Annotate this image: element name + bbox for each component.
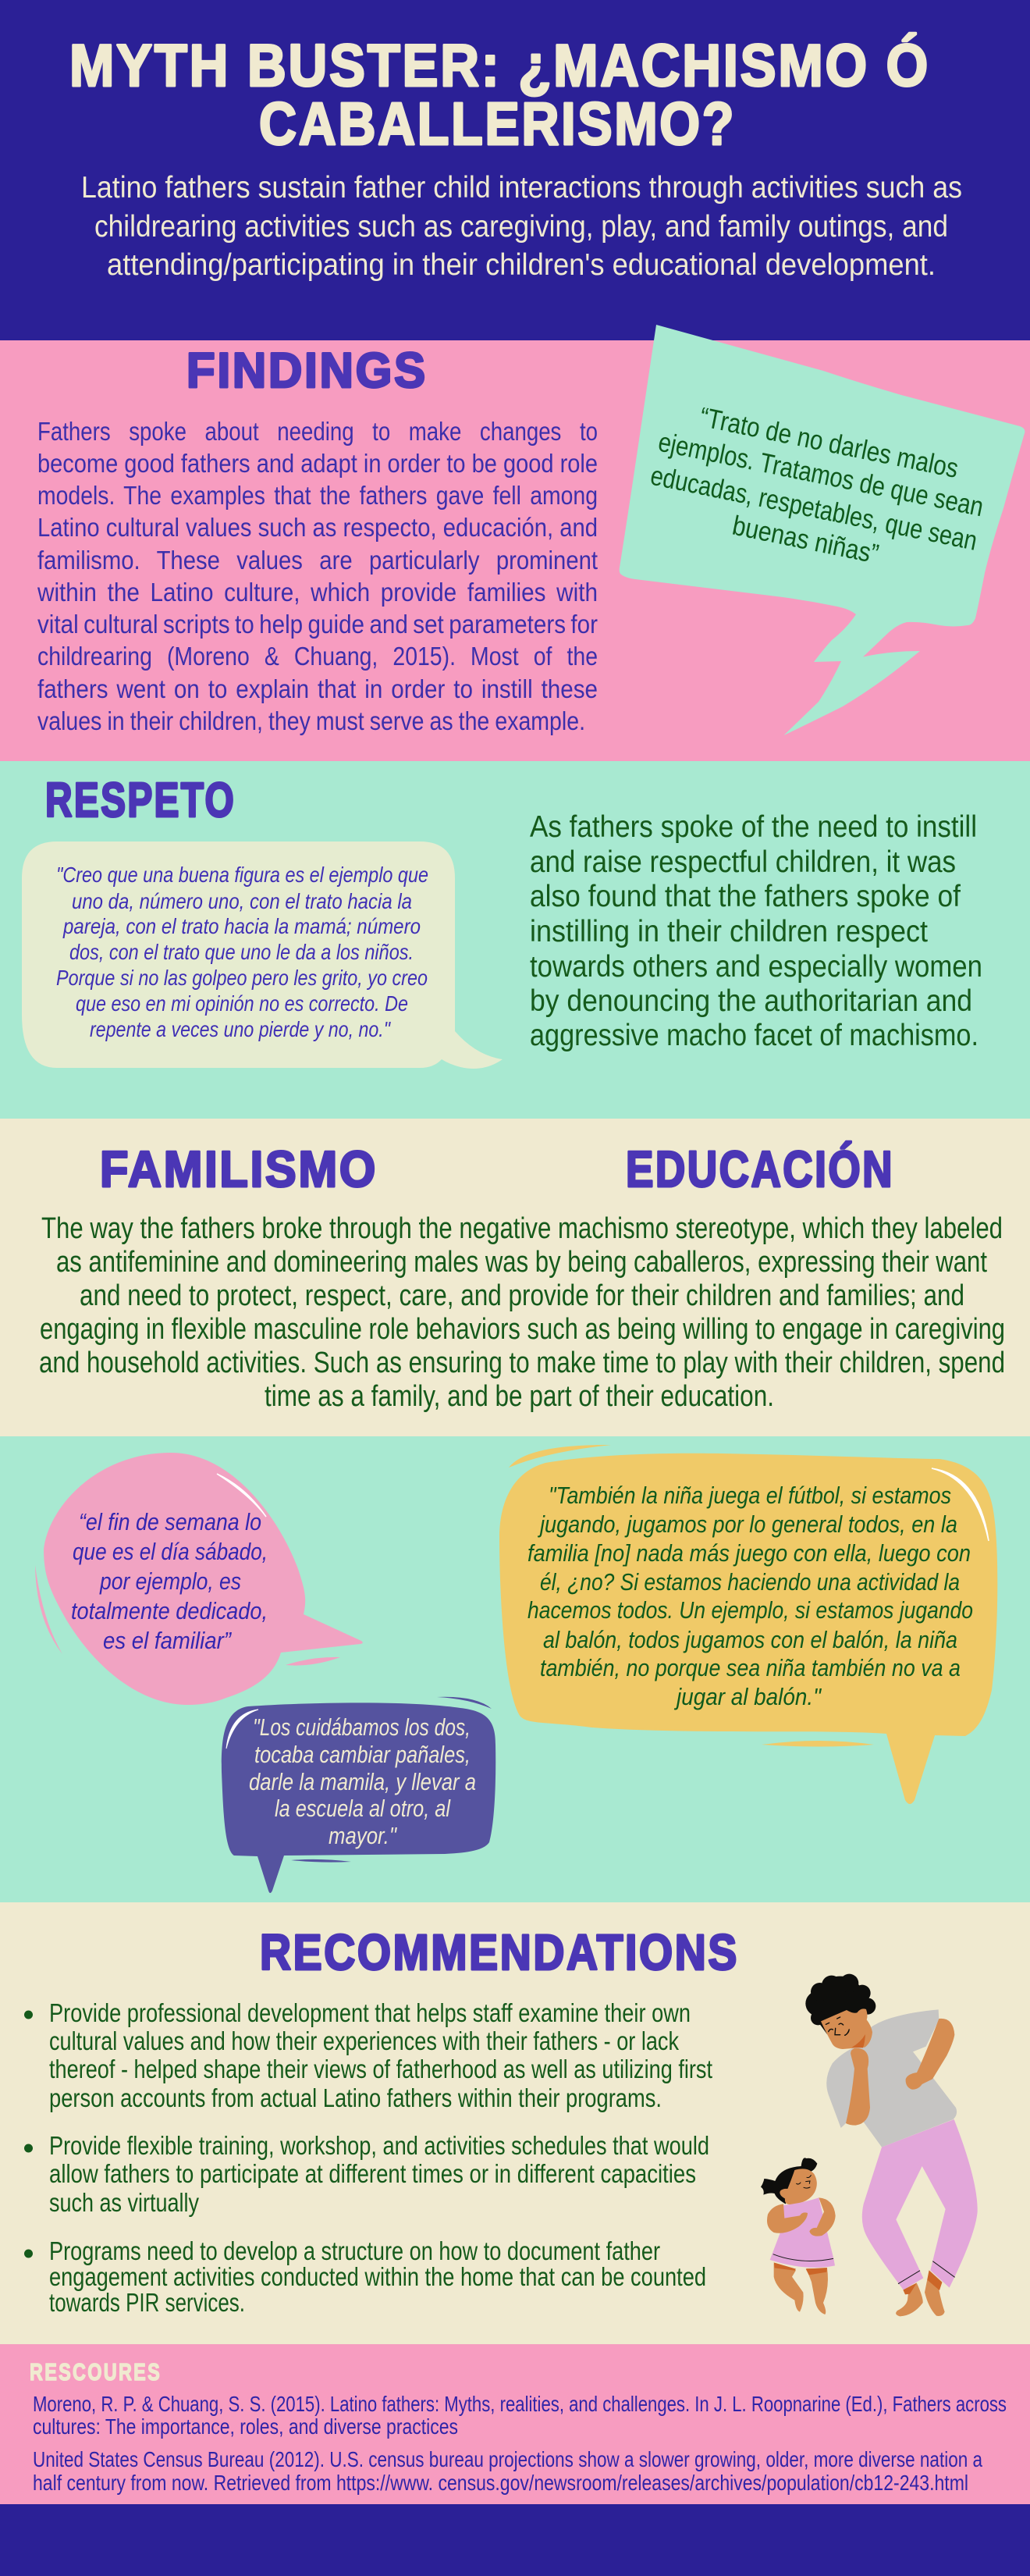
respeto paragraph: by denouncing the authoritarian and — [530, 984, 972, 1018]
recommendation 1: person accounts from actual Latino fathers within their programs. — [49, 2083, 662, 2112]
quote text: mayor." — [329, 1822, 398, 1849]
quote text: repente a veces uno pierde y no, no." — [90, 1017, 391, 1041]
intro text: childrearing activities such as caregiving, play, and family outings, and — [94, 210, 948, 244]
respeto paragraph — [530, 810, 982, 1052]
respeto paragraph: As fathers spoke of the need to instill — [530, 810, 977, 844]
intro text: Latino fathers sustain father child interactions through activities such as — [81, 171, 962, 205]
quote text: "Los cuidábamos los dos, — [253, 1713, 471, 1741]
quote text — [527, 1482, 973, 1710]
panel: respeto — [0, 761, 1030, 1119]
panel: quotes — [0, 1436, 1030, 1902]
findings paragraph: become good fathers and adapt in order to be good role — [37, 449, 598, 478]
title: CABALLERISMO? — [259, 91, 736, 158]
heading: resources: RESCOURES — [30, 2358, 162, 2386]
recommendation 1: thereof - helped shape their views of fatherhood as well as utilizing first — [49, 2055, 712, 2083]
recommendation 3: towards PIR services. — [49, 2288, 245, 2317]
reference 1: cultures: The importance, roles, and diverse practices — [33, 2414, 458, 2439]
quote text: jugando, jugamos por lo general todos, en la — [538, 1510, 957, 1538]
quote text — [56, 863, 428, 1041]
findings paragraph — [37, 417, 598, 735]
findings paragraph: models. The examples that the fathers gave fell among — [37, 481, 598, 510]
quote text: por ejemplo, es — [99, 1567, 241, 1595]
heading: recommendations: RECOMMENDATIONS — [260, 1924, 739, 1980]
panel: findings — [0, 325, 1030, 761]
respeto paragraph: and raise respectful children, it was — [530, 845, 956, 879]
speech bubble: pink quote — [35, 1453, 363, 1705]
quote text: que es el día sábado, — [73, 1538, 268, 1565]
quote text: dos, con el trato que uno le da a los niños. — [69, 940, 414, 964]
recommendation 2: Provide flexible training, workshop, and activities schedules that would — [49, 2131, 709, 2160]
recommendation 2: such as virtually — [49, 2188, 199, 2217]
familismo paragraph: time as a family, and be part of their education. — [265, 1380, 774, 1413]
recommendation 3: engagement activities conducted within the home that can be counted — [49, 2262, 706, 2291]
quote text: familia [no] nada más juego con ella, luego con — [527, 1539, 971, 1567]
findings paragraph: Latino cultural values such as respecto, educación, and — [37, 513, 598, 542]
speech bubble: purple quote — [222, 1697, 495, 1893]
daughter — [761, 2158, 836, 2314]
quote text: es el familiar” — [103, 1627, 232, 1654]
panel: recommendations — [0, 1902, 1030, 2344]
quote text: jugar al balón." — [673, 1683, 822, 1710]
quote text: la escuela al otro, al — [275, 1795, 451, 1822]
recommendation 1: cultural values and how their experiences with their fathers - or lack — [49, 2026, 679, 2055]
quote text: darle la mamila, y llevar a — [249, 1768, 476, 1795]
heading: respeto: RESPETO — [45, 774, 236, 827]
respeto paragraph: instilling in their children respect — [530, 915, 928, 948]
quote text — [648, 402, 986, 570]
findings paragraph: fathers went on to explain that in order to instill these — [37, 674, 598, 703]
speech bubble: yellow quote — [499, 1445, 997, 1804]
findings paragraph: vital cultural scripts to help guide and set parameters for — [37, 610, 598, 639]
heading: findings: FINDINGS — [186, 343, 428, 398]
title — [69, 33, 930, 158]
title: MYTH BUSTER: ¿MACHISMO Ó — [69, 33, 930, 99]
speech bubble: trato quote — [620, 325, 1025, 735]
recommendation 2: allow fathers to participate at different times or in different capacities — [49, 2159, 696, 2188]
findings paragraph: values in their children, they must serve as the example. — [37, 706, 585, 735]
quote text: tocaba cambiar pañales, — [254, 1741, 471, 1768]
findings paragraph: within the Latino culture, which provide families with — [37, 578, 598, 607]
quote text — [71, 1508, 268, 1654]
father — [805, 1974, 978, 2316]
intro text: attending/participating in their children's educational development. — [107, 248, 936, 282]
recommendation 1 — [24, 1998, 712, 2112]
intro text — [81, 171, 962, 282]
panel: familismo and educacion — [0, 1119, 1030, 1436]
quote text: pareja, con el trato hacia la mamá; número — [62, 914, 421, 938]
illustration: father and daughter dancing — [761, 1974, 978, 2316]
quote text: que eso en mi opinión no es correcto. De — [76, 991, 408, 1016]
quote text: totalmente dedicado, — [71, 1597, 268, 1624]
quote text: "También la niña juega el fútbol, si estamos — [549, 1482, 951, 1509]
quote text: Porque si no las golpeo pero les grito, yo creo — [56, 966, 428, 990]
findings paragraph: Fathers spoke about needing to make changes to — [37, 417, 598, 446]
footer band — [0, 2504, 1030, 2576]
speech bubble: respeto quote — [22, 841, 503, 1069]
findings paragraph: childrearing (Moreno & Chuang, 2015). Most of the — [37, 642, 598, 671]
quote text: buenas niñas” — [730, 511, 881, 570]
quote text — [249, 1713, 476, 1849]
panel: resources — [0, 2344, 1030, 2504]
recommendation 3: Programs need to develop a structure on how to document father — [49, 2236, 660, 2265]
quote text: “el fin de semana lo — [79, 1508, 261, 1535]
quote text: uno da, número uno, con el trato hacia la — [72, 889, 412, 913]
panel: header — [0, 0, 1030, 341]
quote text: “Trato de no darles malos — [697, 402, 961, 484]
quote text: él, ¿no? Si estamos haciendo una actividad la — [540, 1568, 960, 1596]
quote text: también, no porque sea niña también no va a — [540, 1654, 961, 1681]
recommendation 3 — [24, 2236, 706, 2317]
quote text: "Creo que una buena figura es el ejemplo que — [56, 863, 428, 887]
heading: familismo: FAMILISMO — [100, 1140, 378, 1197]
heading: educacion: EDUCACIÓN — [626, 1140, 894, 1197]
reference 1 — [33, 2392, 1007, 2439]
reference 2 — [33, 2447, 982, 2495]
respeto paragraph: also found that the fathers spoke of — [530, 880, 961, 913]
recommendation 1: Provide professional development that helps staff examine their own — [49, 1998, 691, 2027]
findings paragraph: familismo. These values are particularly prominent — [37, 546, 598, 575]
respeto paragraph: towards others and especially women — [530, 950, 982, 984]
quote text: al balón, todos jugamos con el balón, la niña — [543, 1626, 957, 1653]
recommendation 2 — [24, 2131, 709, 2217]
familismo paragraph — [39, 1212, 1005, 1413]
respeto paragraph: aggressive macho facet of machismo. — [530, 1019, 978, 1052]
